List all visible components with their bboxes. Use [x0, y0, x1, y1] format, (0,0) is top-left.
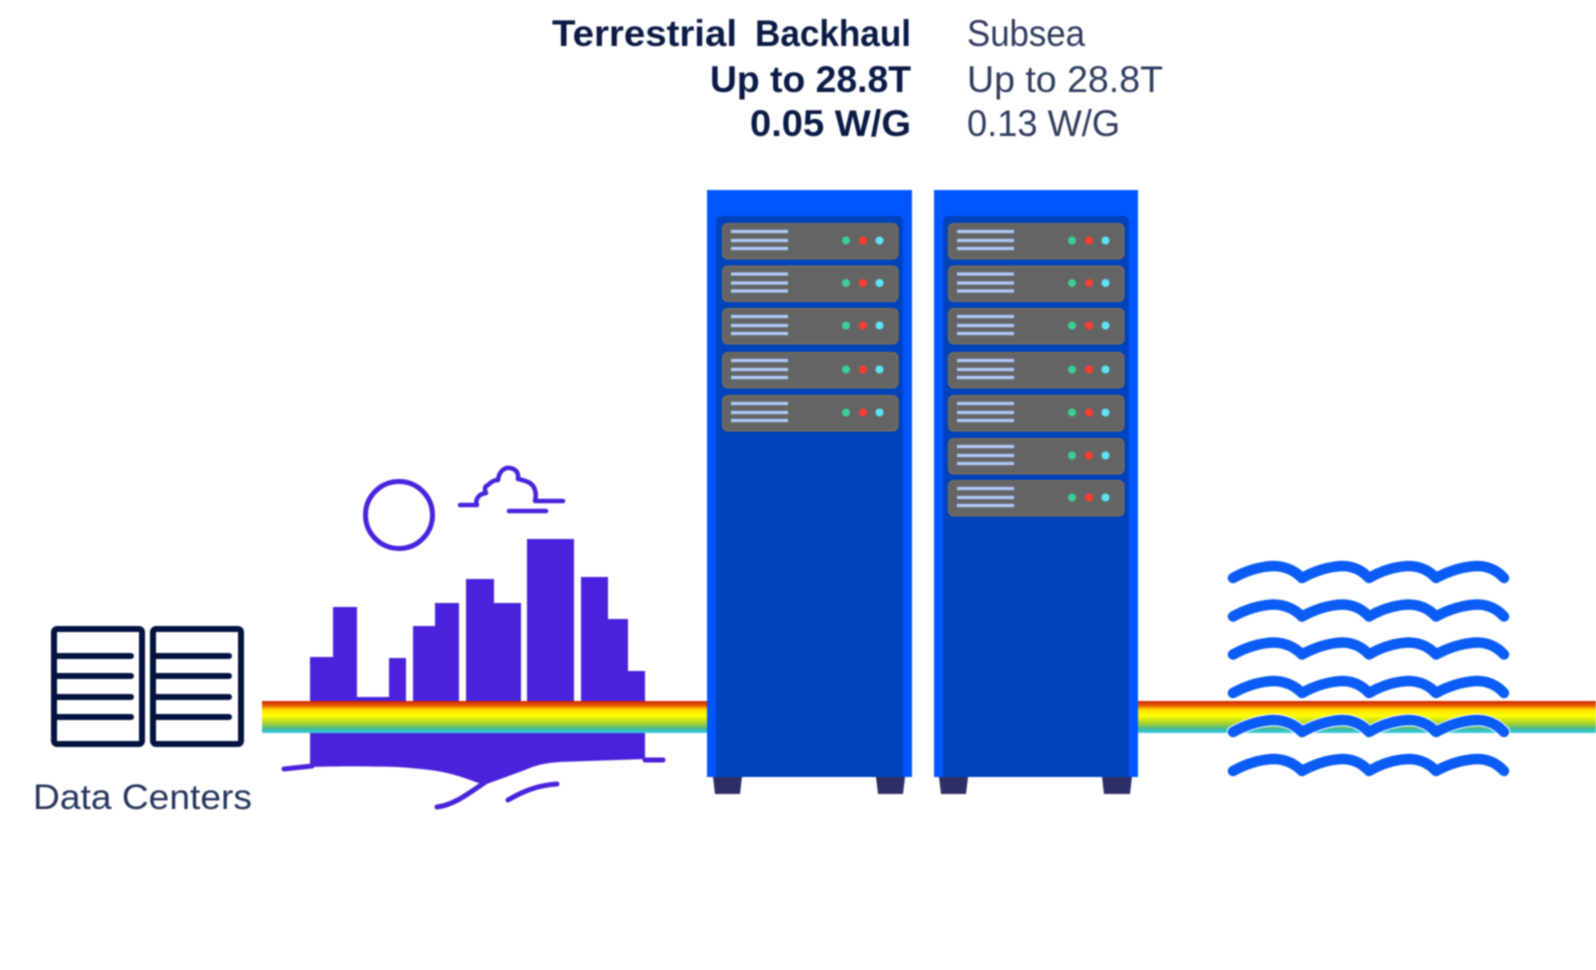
- rack: terrestrial backhaul: [707, 190, 912, 794]
- heading: subsea specs: Up to 28.8T: [967, 59, 1163, 100]
- label: data centers: Data Centers: [33, 778, 252, 817]
- heading: terrestrial backhaul specs: Up to 28.8T: [710, 59, 911, 100]
- icon: ocean waves: [1233, 566, 1504, 771]
- buildings: [310, 539, 645, 785]
- heading: terrestrial backhaul specs: [552, 13, 911, 144]
- fiber line: right rainbow band: [1138, 701, 1596, 733]
- heading: terrestrial backhaul specs: Terrestrial: [552, 13, 737, 54]
- icon: cloud: [460, 468, 563, 511]
- heading: subsea specs: 0.13 W/G: [967, 103, 1120, 144]
- rack: subsea: [934, 190, 1138, 794]
- fiber line: left rainbow band: [262, 701, 707, 733]
- icon: sun: [366, 482, 432, 548]
- heading: subsea specs: [967, 13, 1163, 144]
- heading: terrestrial backhaul specs: 0.05 W/G: [750, 103, 911, 144]
- shoreline strokes: [284, 760, 663, 807]
- heading: subsea specs: Subsea: [967, 13, 1085, 54]
- icon: city skyline: [284, 468, 663, 807]
- heading: terrestrial backhaul specs: Backhaul: [755, 13, 911, 54]
- icon: data centers: [54, 629, 241, 744]
